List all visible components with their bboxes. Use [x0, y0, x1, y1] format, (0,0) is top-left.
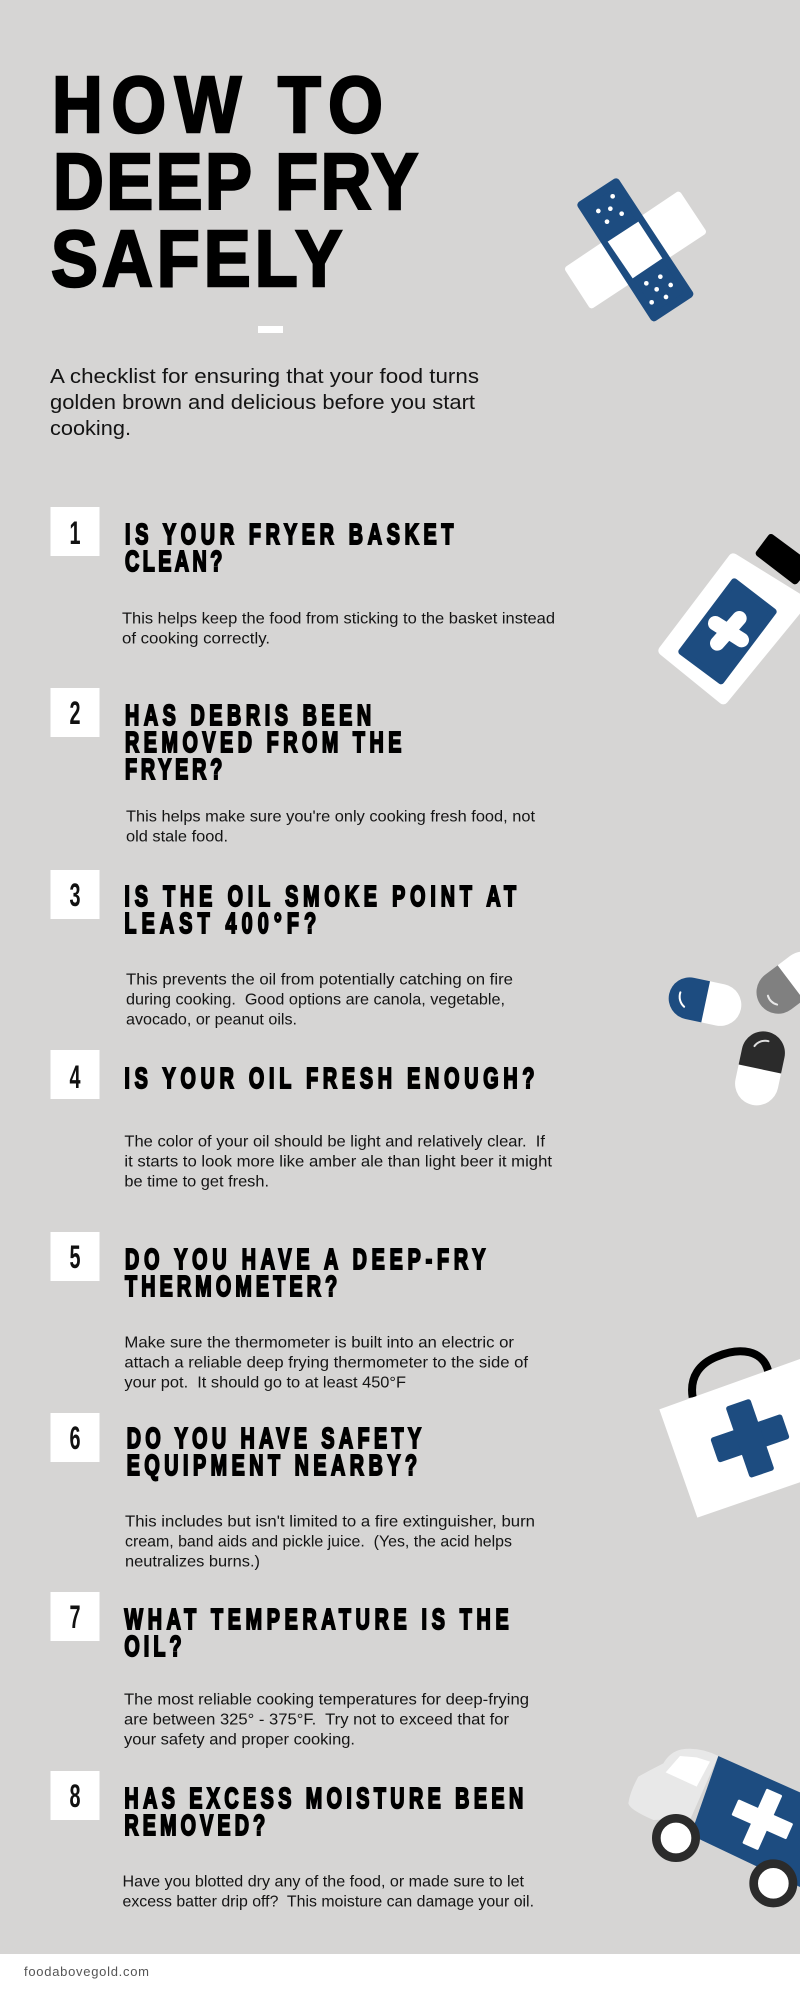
- number badge 7: 7: [70, 1599, 80, 1635]
- heading 1: IS YOUR FRYER BASKET: [125, 519, 453, 551]
- body text 4: be time to get fresh.: [124, 1174, 269, 1190]
- icon: medicine bottle: [663, 537, 800, 699]
- heading 2: HAS DEBRIS BEEN: [125, 700, 371, 732]
- heading 2: [125, 700, 401, 786]
- subtitle: [50, 365, 479, 440]
- icon: ambulance: [628, 1749, 800, 1903]
- panel: step 2: [50, 688, 536, 846]
- body text 2: This helps make sure you're only cooking fresh food, not: [126, 808, 536, 826]
- heading 2: REMOVED FROM THE: [125, 727, 401, 759]
- body text 7: are between 325° - 375°F. Try not to exceed that for: [124, 1712, 510, 1728]
- number badge 7: [50, 1592, 100, 1641]
- heading 4: IS YOUR OIL FRESH ENOUGH?: [124, 1063, 534, 1095]
- body text 7: The most reliable cooking temperatures for deep-frying: [124, 1692, 529, 1708]
- title: DEEP FRY: [53, 137, 418, 226]
- heading 3: [124, 881, 516, 940]
- heading 5: THERMOMETER?: [125, 1271, 337, 1303]
- heading 7: [124, 1604, 509, 1663]
- number badge 4: [50, 1050, 100, 1099]
- black pill: [731, 1027, 789, 1109]
- number badge 3: [50, 870, 100, 919]
- number badge 8: 8: [70, 1778, 80, 1814]
- body text 5: attach a reliable deep frying thermometer to the side of: [124, 1354, 529, 1372]
- icon: pills: [665, 943, 800, 1109]
- heading 2: FRYER?: [125, 754, 222, 786]
- heading 7: OIL?: [124, 1631, 182, 1663]
- number badge 1: 1: [70, 515, 80, 551]
- panel: step 8: [50, 1771, 534, 1910]
- body text 4: [124, 1134, 553, 1190]
- body text 4: The color of your oil should be light and relatively clear. If: [124, 1134, 546, 1150]
- body text 3: avocado, or peanut oils.: [126, 1012, 297, 1028]
- icon: first aid kit: [659, 1351, 800, 1518]
- number badge 1: [50, 507, 100, 556]
- subtitle: cooking.: [50, 417, 131, 440]
- body text 4: it starts to look more like amber ale than light beer it might: [124, 1154, 553, 1170]
- blue pill: [665, 974, 745, 1030]
- number badge 3: 3: [70, 877, 80, 913]
- number badge 5: [50, 1232, 100, 1281]
- number badge 5: 5: [70, 1239, 80, 1275]
- number badge 6: 6: [70, 1420, 80, 1456]
- body text 6: This includes but isn't limited to a fire extinguisher, burn: [125, 1514, 535, 1530]
- body text 8: [122, 1874, 534, 1910]
- body text 1: of cooking correctly.: [122, 630, 270, 648]
- title accent dash: [258, 326, 283, 333]
- subtitle: golden brown and delicious before you start: [50, 391, 475, 414]
- heading 8: [124, 1783, 523, 1842]
- body text 6: neutralizes burns.): [125, 1554, 260, 1570]
- heading 6: EQUIPMENT NEARBY?: [127, 1450, 417, 1482]
- panel: step 7: [50, 1592, 529, 1748]
- icon: bandage: [568, 182, 703, 317]
- panel: step 1: [50, 507, 555, 648]
- panel: step 4: [50, 1050, 553, 1190]
- panel: step 6: [50, 1413, 535, 1570]
- number badge 4: 4: [70, 1059, 81, 1095]
- body text 5: Make sure the thermometer is built into an electric or: [124, 1334, 515, 1352]
- body text 3: during cooking. Good options are canola, vegetable,: [126, 992, 505, 1008]
- heading 1: [125, 519, 453, 578]
- panel: step 5: [50, 1232, 529, 1392]
- number badge 6: [50, 1413, 100, 1462]
- subtitle: A checklist for ensuring that your food turns: [50, 365, 479, 388]
- footer: [0, 1954, 800, 2000]
- body text 2: [126, 808, 536, 846]
- heading 7: WHAT TEMPERATURE IS THE: [124, 1604, 509, 1636]
- heading 6: DO YOU HAVE SAFETY: [127, 1423, 422, 1455]
- title: [51, 60, 418, 303]
- number badge 2: [50, 688, 100, 737]
- heading 1: CLEAN?: [125, 546, 222, 578]
- body text 8: Have you blotted dry any of the food, or made sure to let: [122, 1874, 525, 1890]
- number badge 2: 2: [70, 695, 80, 731]
- body text 3: [126, 972, 513, 1028]
- number badge 8: [50, 1771, 100, 1820]
- body text 5: your pot. It should go to at least 450°F: [124, 1374, 406, 1392]
- body text 8: excess batter drip off? This moisture can damage your oil.: [122, 1894, 534, 1910]
- gray pill: [748, 943, 800, 1022]
- body text 3: This prevents the oil from potentially catching on fire: [126, 972, 513, 988]
- panel: step 3: [50, 870, 516, 1028]
- body text 6: cream, band aids and pickle juice. (Yes, the acid helps: [125, 1534, 512, 1550]
- body text 5: [124, 1334, 529, 1392]
- title: SAFELY: [51, 214, 342, 303]
- heading 5: DO YOU HAVE A DEEP-FRY: [125, 1244, 486, 1276]
- body text 1: This helps keep the food from sticking to the basket instead: [122, 610, 555, 628]
- heading 8: REMOVED?: [124, 1810, 265, 1842]
- title: HOW TO: [52, 60, 383, 149]
- heading 8: HAS EXCESS MOISTURE BEEN: [124, 1783, 523, 1815]
- heading 3: LEAST 400°F?: [124, 908, 316, 940]
- heading 5: [125, 1244, 486, 1303]
- body text 7: [124, 1692, 529, 1748]
- heading 6: [127, 1423, 422, 1482]
- footer: foodabovegold.com: [24, 1964, 149, 1979]
- heading 3: IS THE OIL SMOKE POINT AT: [124, 881, 516, 913]
- body text 2: old stale food.: [126, 828, 228, 846]
- body text 6: [125, 1514, 535, 1570]
- body text 7: your safety and proper cooking.: [124, 1732, 355, 1748]
- body text 1: [122, 610, 555, 648]
